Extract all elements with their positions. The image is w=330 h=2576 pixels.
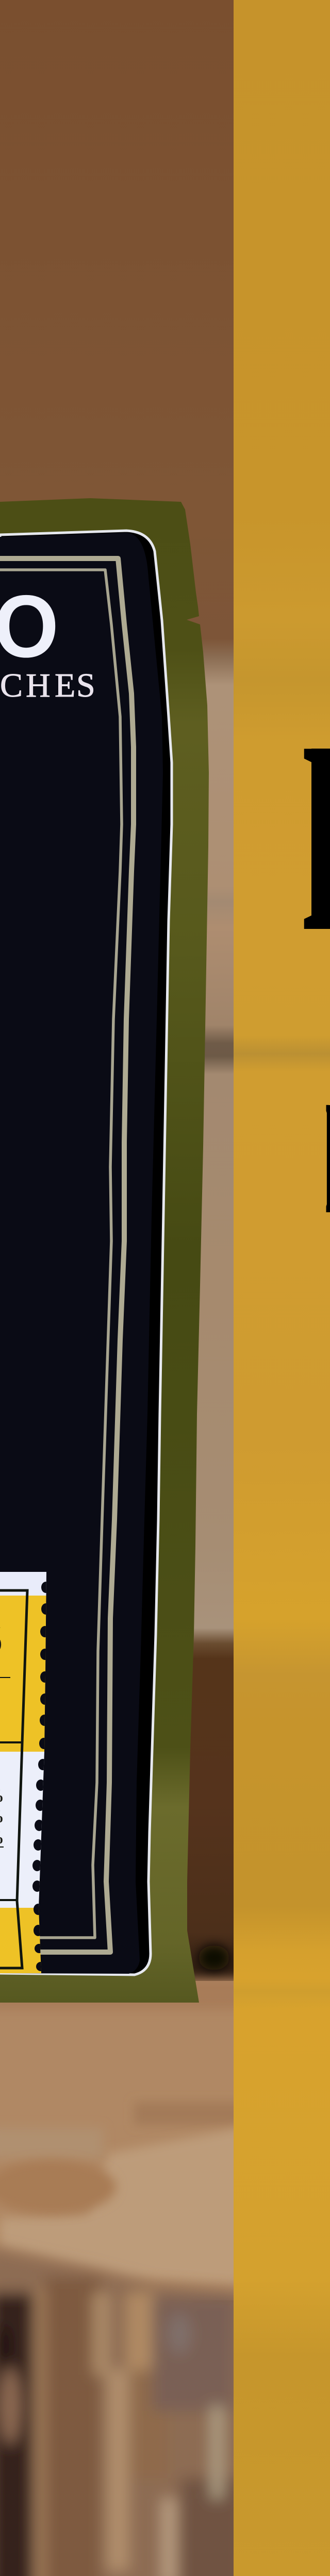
gold panel xyxy=(234,0,330,2576)
photo: dark shadow under the pouch xyxy=(199,1945,229,1970)
background photo xyxy=(0,641,234,2576)
pouch xyxy=(0,498,209,2003)
panel: second heading letter (cropped): I xyxy=(326,1066,329,1248)
pouch: white edge and black gusset xyxy=(0,531,172,1975)
pouch: inner gold frame line xyxy=(0,570,122,1938)
label: percent values xyxy=(0,1790,3,1843)
wood stump top xyxy=(0,1978,248,2300)
pouch: brand subtitle: CHES xyxy=(0,667,95,704)
label: inner frame lines xyxy=(0,1590,27,1968)
label: perforations xyxy=(32,1582,46,1971)
pouch: olive seal border xyxy=(0,498,209,2003)
stump bark side xyxy=(0,2246,248,2576)
pouch: stamp label xyxy=(0,1572,52,1973)
pouch: outer gold frame line xyxy=(0,558,134,1952)
pouch: navy front face xyxy=(0,533,163,1974)
